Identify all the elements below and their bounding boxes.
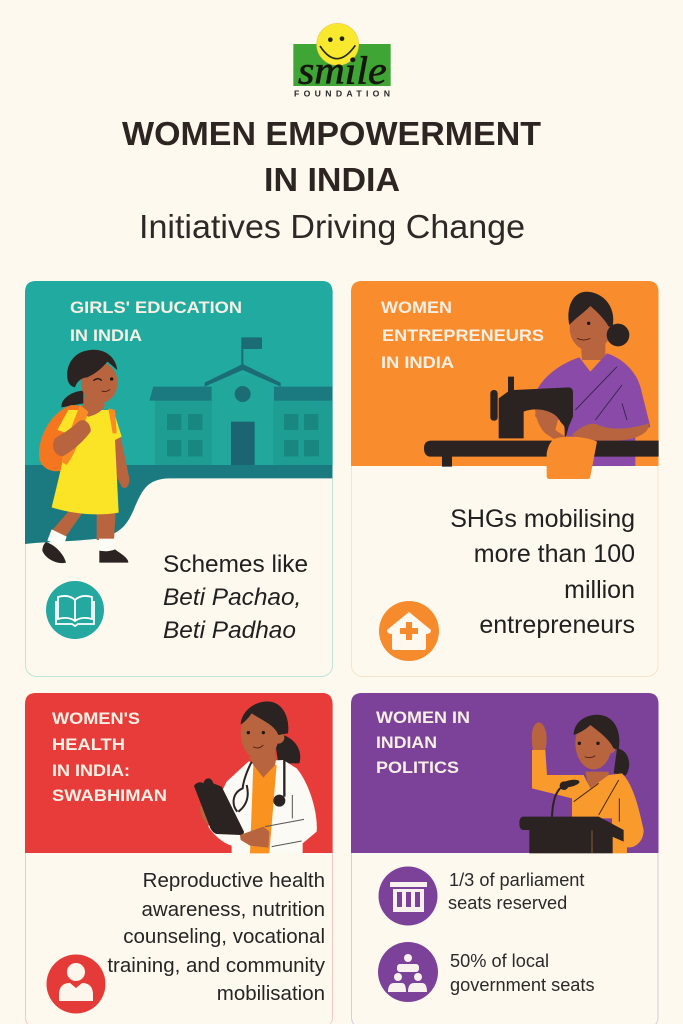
panel: women entrepreneurs <box>351 281 659 676</box>
logo: Smile Foundation <box>293 23 391 98</box>
text: reproductive health: Reproductive health <box>143 869 325 892</box>
text: reproductive health: mobilisation <box>217 982 325 1005</box>
text: SHGs: million <box>564 576 635 604</box>
text: schemes: Schemes like <box>163 551 308 578</box>
heading: IN INDIA <box>70 326 142 345</box>
icon: parliament building <box>378 866 438 926</box>
icon: person <box>46 954 106 1014</box>
text: reproductive health: training, and community <box>107 954 326 977</box>
heading: ENTREPRENEURS <box>382 326 544 345</box>
text: parliament seats: 1/3 of parliament <box>449 870 584 890</box>
text: SHGs <box>450 505 635 639</box>
illustration: schoolgirl with backpack <box>39 350 129 563</box>
orange cloth <box>547 437 597 479</box>
heading <box>376 708 470 777</box>
illustration: woman at sewing machine <box>424 292 659 479</box>
purple header <box>351 693 658 853</box>
text: parliament seats <box>448 870 584 913</box>
text: local government seats: government seats <box>450 975 595 995</box>
orange header <box>351 281 658 466</box>
heading: IN INDIA <box>381 353 454 372</box>
illustration: doctor with clipboard <box>194 701 317 853</box>
title: IN INDIA <box>264 161 400 198</box>
heading <box>381 298 544 372</box>
icon: hierarchy of people <box>378 942 438 1002</box>
heading <box>52 709 167 805</box>
heading: POLITICS <box>376 758 459 777</box>
heading: IN INDIA: <box>52 761 130 780</box>
title: WOMEN EMPOWERMENT <box>122 115 541 152</box>
heading <box>70 298 242 345</box>
heading: GIRLS' EDUCATION <box>70 298 242 317</box>
text: schemes <box>163 551 308 644</box>
text: SHGs: SHGs mobilising <box>450 505 635 533</box>
panel: women's health <box>25 693 332 1024</box>
text: schemes: Beti Padhao <box>163 617 296 644</box>
panel: girls' education <box>25 281 332 676</box>
icon: book <box>46 581 104 639</box>
illustration: woman at podium <box>519 715 644 853</box>
text: reproductive health <box>107 869 326 1005</box>
text: reproductive health: counseling, vocational <box>123 925 325 948</box>
school building <box>25 337 332 544</box>
heading: HEALTH <box>52 735 125 754</box>
logo: Smile Foundation: smile <box>298 50 387 92</box>
text: SHGs: more than 100 <box>474 540 635 568</box>
heading: INDIAN <box>376 733 437 752</box>
sewing machine <box>499 377 573 438</box>
text: SHGs: entrepreneurs <box>479 611 635 639</box>
heading: WOMEN <box>381 298 452 317</box>
text: reproductive health: awareness, nutrition <box>142 898 325 921</box>
logo: Smile Foundation: FOUNDATION <box>294 88 390 98</box>
panel: women in politics <box>351 693 658 1024</box>
heading: WOMEN'S <box>52 709 140 728</box>
text: local government seats <box>450 951 595 995</box>
red header <box>25 693 332 853</box>
text: parliament seats: seats reserved <box>448 893 567 913</box>
heading: SWABHIMAN <box>52 786 167 805</box>
title <box>122 115 541 245</box>
icon: house with cross <box>379 601 439 661</box>
text: local government seats: 50% of local <box>450 951 549 971</box>
text: schemes: Beti Pachao, <box>163 584 301 611</box>
teal header <box>25 281 332 466</box>
title: Initiatives Driving Change <box>139 208 525 245</box>
heading: WOMEN IN <box>376 708 470 727</box>
